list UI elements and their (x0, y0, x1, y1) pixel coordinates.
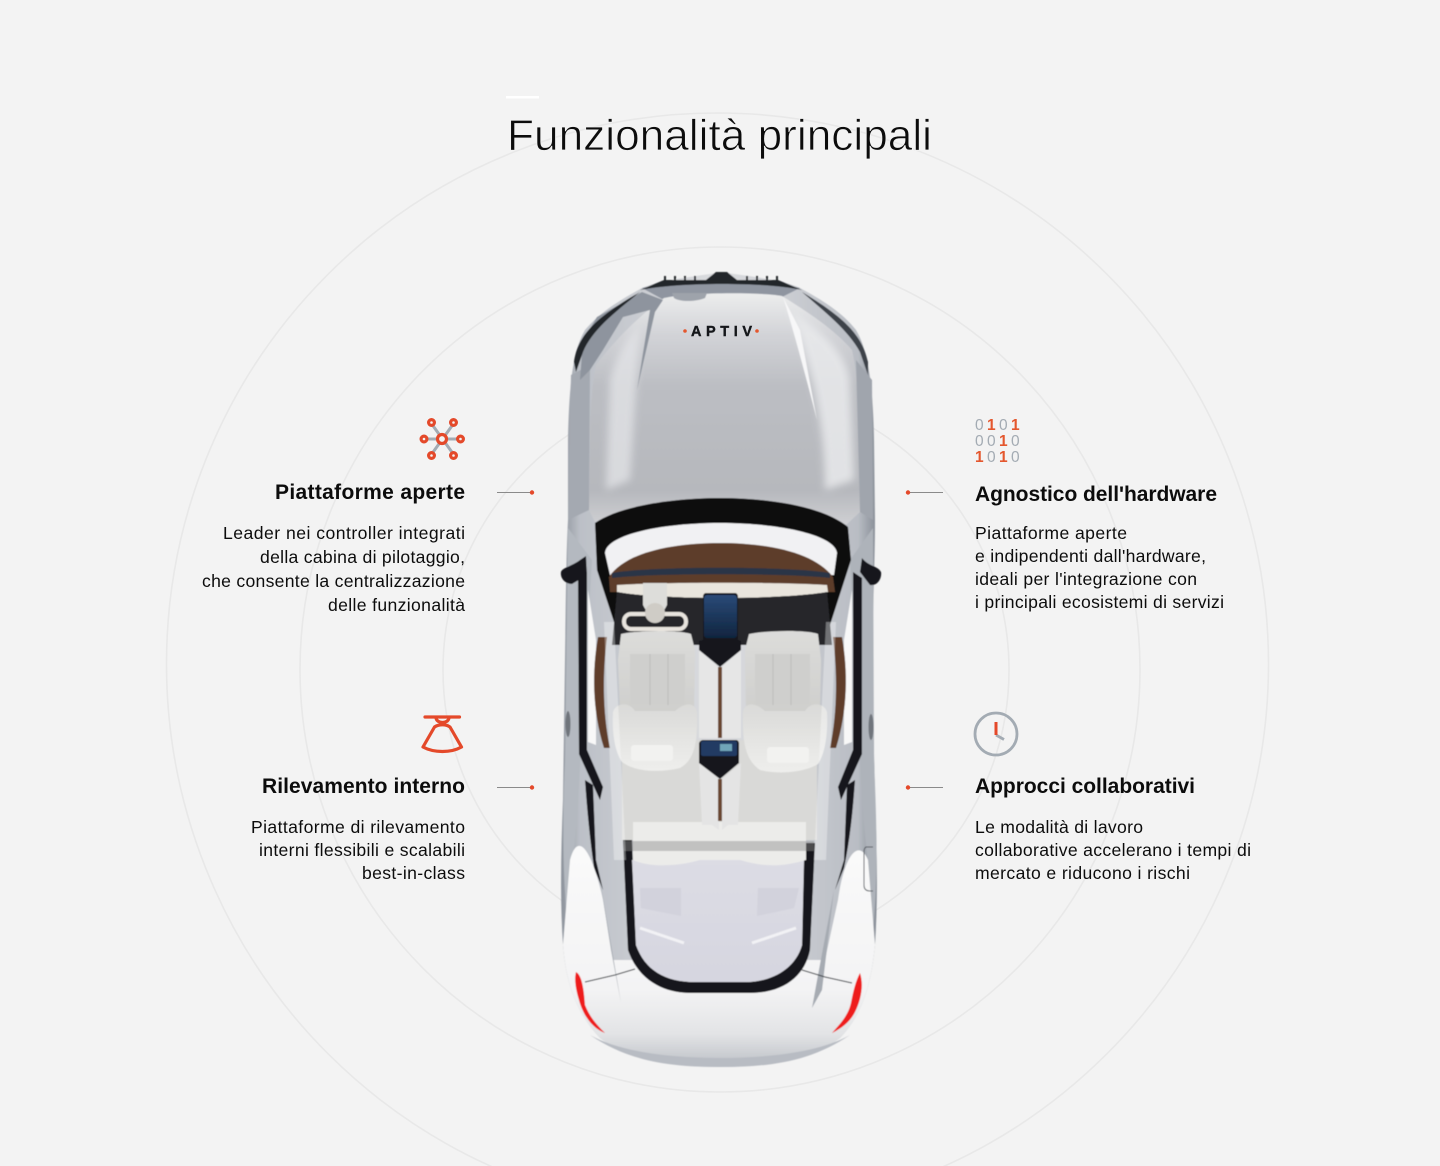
door handles (566, 711, 570, 737)
tail light right (832, 973, 862, 1033)
hood soft sheen left (606, 325, 640, 490)
icon: binary digits: 1 (987, 417, 996, 434)
shoulder dark trim right (802, 292, 868, 375)
connector (906, 785, 943, 790)
rear black frame (623, 840, 815, 993)
icon: clock (975, 713, 1017, 755)
steering wheel (643, 583, 667, 616)
brown arc (609, 543, 835, 592)
hood side band right (856, 360, 873, 520)
panel: Piattaforme aperte (202, 420, 534, 615)
car top view (561, 272, 881, 1067)
brown door trims (594, 637, 610, 748)
description (251, 817, 465, 883)
heading: Piattaforme aperte (275, 481, 465, 504)
rear seats (633, 822, 806, 865)
description (975, 523, 1224, 612)
description (202, 523, 465, 615)
glass pillars (604, 622, 836, 860)
white door insets (588, 590, 596, 745)
icon: binary digits: 1 (999, 433, 1008, 450)
description: mercato e riducono i rischi (975, 863, 1190, 883)
description: Leader nei controller integrati (223, 523, 465, 543)
cabin floor (622, 740, 817, 840)
icon: binary digits: 0 (1011, 449, 1020, 466)
description: Piattaforme aperte (975, 523, 1127, 543)
icon: binary digits (975, 417, 1020, 466)
side panel left (563, 528, 592, 930)
hood reflection right (783, 297, 817, 420)
hood dark reflection left (580, 292, 663, 390)
rear floor (632, 860, 804, 982)
side panel right (850, 528, 876, 930)
rear quarter windows (585, 780, 603, 890)
panel: Rilevamento interno (251, 717, 534, 883)
car body (561, 272, 877, 1067)
description (975, 817, 1251, 883)
icon: sensor cone (423, 717, 462, 752)
display strip (612, 568, 830, 578)
heading: Rilevamento interno (262, 775, 465, 798)
hood (589, 293, 860, 525)
front band (642, 282, 800, 300)
icon: network hub (421, 420, 463, 458)
front grille teeth (640, 272, 802, 290)
description: interni flessibili e scalabili (259, 840, 465, 860)
icon: binary digits: 0 (999, 417, 1008, 434)
description: che consente la centralizzazione (202, 571, 465, 591)
right mirror (860, 558, 881, 585)
icon: binary digits: 1 (975, 449, 984, 466)
description: ideali per l'integrazione con (975, 569, 1197, 589)
icon: binary digits: 0 (1011, 433, 1020, 450)
right seat (743, 631, 827, 772)
shoulder dark trim left (574, 292, 640, 372)
icon: binary digits: 1 (1011, 417, 1020, 434)
title accent dash (506, 96, 539, 98)
rear console and screen (699, 740, 741, 830)
front console (699, 650, 741, 738)
description: delle funzionalità (328, 595, 465, 615)
centre screen (699, 593, 741, 667)
windshield black frame (595, 498, 851, 625)
logo text: APTIV (691, 324, 752, 340)
icon: binary digits: 1 (999, 449, 1008, 466)
left seat (613, 631, 697, 771)
hood vent (672, 293, 707, 301)
description: e indipendenti dall'hardware, (975, 546, 1206, 566)
fuel flap (864, 847, 873, 891)
description: best-in-class (362, 863, 465, 883)
floor panels (640, 888, 681, 916)
connector (497, 490, 534, 495)
tail light left (575, 972, 605, 1033)
icon: binary digits: 0 (987, 449, 996, 466)
description: Le modalità di lavoro (975, 817, 1143, 837)
icon: binary digits: 0 (975, 417, 984, 434)
rear deck (563, 846, 875, 1067)
panel: Approcci collaborativi (906, 713, 1251, 883)
side black stripes (578, 572, 603, 800)
icon: binary digits: 0 (975, 433, 984, 450)
heading: Agnostico dell'hardware (975, 483, 1217, 506)
left mirror (561, 556, 587, 584)
description: Piattaforme di rilevamento (251, 817, 465, 837)
hood side band left (568, 365, 590, 520)
description: collaborative accelerano i tempi di (975, 840, 1251, 860)
concentric rings background (166, 113, 1268, 1166)
hood soft sheen right (790, 310, 854, 490)
icon: binary digits: 0 (987, 433, 996, 450)
seam lines (585, 969, 852, 983)
connector (906, 490, 943, 495)
rear grey reflections (600, 880, 834, 1008)
heading: Approcci collaborativi (975, 775, 1195, 798)
panel: Agnostico dell'hardware (906, 417, 1224, 612)
description: i principali ecosistemi di servizi (975, 592, 1224, 612)
cream dash (617, 583, 828, 598)
dark interior (612, 592, 832, 645)
connector (497, 785, 534, 790)
description: della cabina di pilotaggio, (260, 547, 465, 567)
cowl white arc (605, 523, 837, 575)
title: Funzionalità principali (507, 111, 932, 160)
